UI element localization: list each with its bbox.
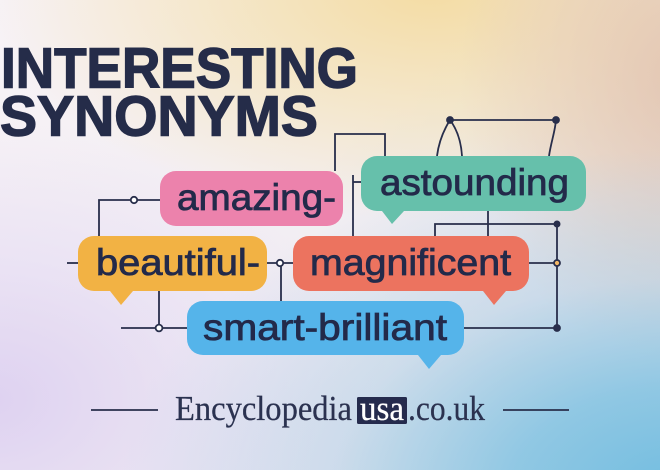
footer right rule <box>503 409 569 411</box>
label: beautiful: beautiful- <box>96 242 260 283</box>
footer brand: usa <box>360 389 404 428</box>
label: magnificent: magnificent <box>310 242 512 283</box>
label: astounding: astounding <box>380 162 569 203</box>
footer brand: .co.uk <box>408 389 485 428</box>
label: astounding <box>361 156 586 224</box>
footer brand: Encyclopedia <box>175 389 352 428</box>
label: smart-brilliant: smart-brilliant <box>203 307 448 348</box>
title: SYNONYMS <box>0 84 318 148</box>
label: amazing: amazing- <box>177 177 336 218</box>
title: INTERESTING <box>1 36 358 100</box>
footer left rule <box>91 409 158 411</box>
title <box>0 36 358 148</box>
label: amazing <box>160 171 343 226</box>
label: beautiful <box>78 236 267 305</box>
label: magnificent <box>293 236 529 305</box>
connector network <box>67 117 560 331</box>
label: smart-brilliant <box>187 301 464 369</box>
footer brand <box>175 389 485 428</box>
